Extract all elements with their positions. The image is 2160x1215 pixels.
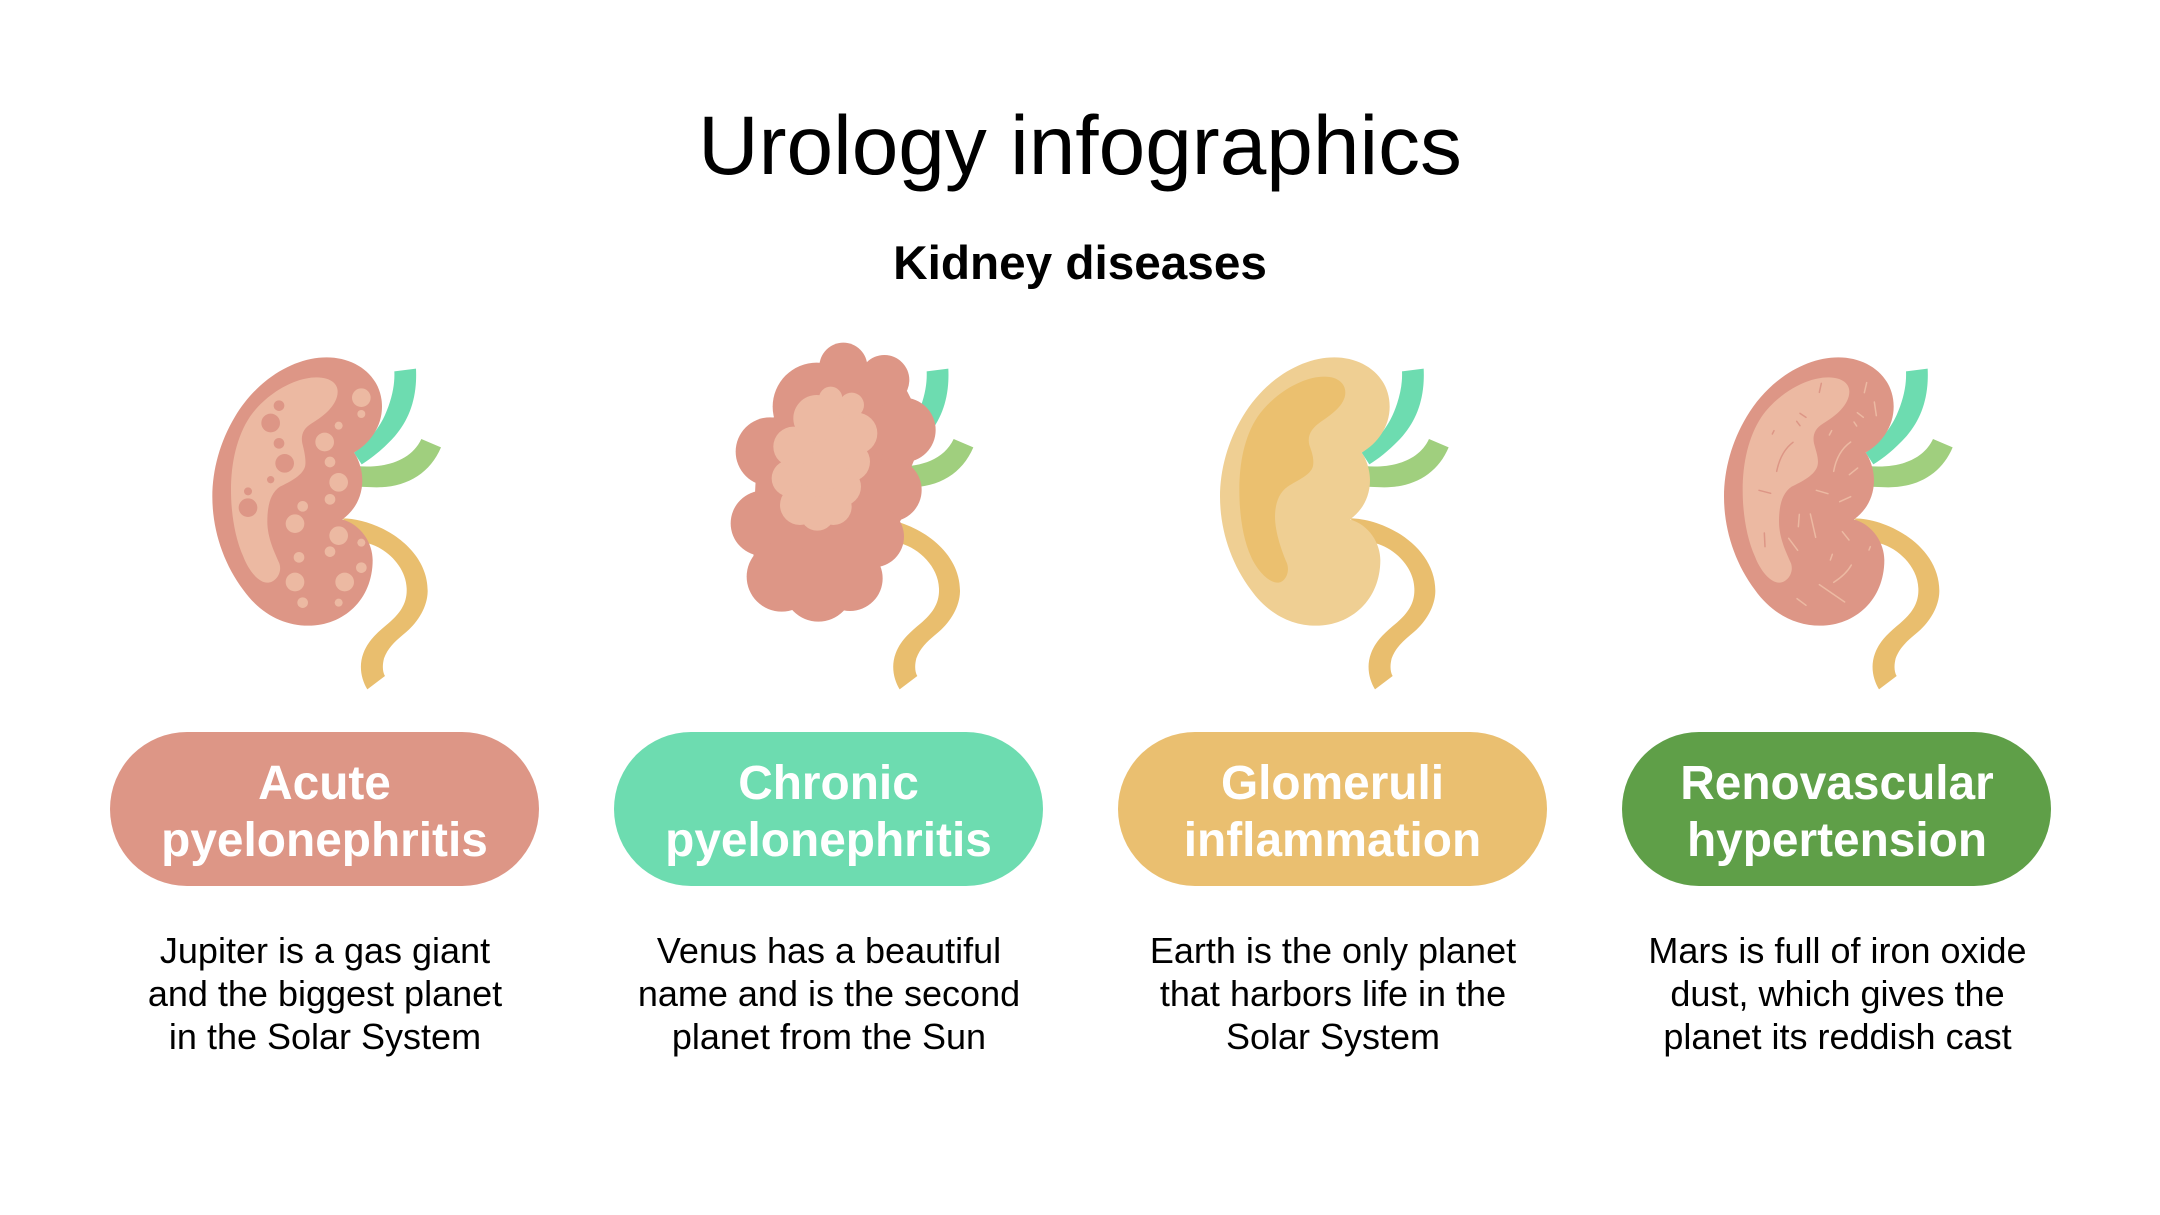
description: renovascular hypertension: Mars is full of iron oxide	[1648, 930, 2027, 971]
panel: renovascular hypertension	[1622, 357, 2051, 1057]
description: glomeruli inflammation: Solar System	[1226, 1016, 1440, 1057]
subtitle: Kidney diseases	[893, 237, 1267, 290]
description: renovascular hypertension: planet its reddish cast	[1663, 1016, 2012, 1057]
description: renovascular hypertension: dust, which gives the	[1670, 973, 2005, 1014]
description: glomeruli inflammation: Earth is the only planet	[1150, 930, 1516, 971]
panel: glomeruli inflammation	[1118, 357, 1547, 1057]
label pill: renovascular hypertension: hypertension	[1687, 814, 1987, 867]
description: glomeruli inflammation: that harbors life in the	[1160, 973, 1506, 1014]
label pill: chronic pyelonephritis: pyelonephritis	[665, 814, 992, 867]
icon: kidney with dots	[212, 357, 441, 689]
icon: inflamed yellow kidney	[1220, 357, 1449, 689]
label pill: renovascular hypertension: Renovascular	[1680, 757, 1994, 810]
description: acute pyelonephritis: Jupiter is a gas giant	[160, 930, 490, 971]
description: glomeruli inflammation	[1150, 930, 1516, 1057]
panel: acute pyelonephritis	[110, 357, 539, 1057]
icon: scarred kidney	[1724, 357, 1953, 689]
label pill: glomeruli inflammation: Glomeruli	[1221, 757, 1444, 810]
description: chronic pyelonephritis: Venus has a beautiful	[657, 930, 1001, 971]
label pill: acute pyelonephritis: Acute	[258, 757, 391, 810]
label pill: renovascular hypertension	[1622, 732, 2051, 886]
label pill: acute pyelonephritis: pyelonephritis	[161, 814, 488, 867]
description: acute pyelonephritis	[148, 930, 502, 1057]
icon: shrunken bumpy kidney	[731, 343, 973, 689]
label pill: chronic pyelonephritis: Chronic	[738, 757, 919, 810]
title: Urology infographics	[698, 98, 1462, 192]
label pill: acute pyelonephritis	[110, 732, 539, 886]
label pill: glomeruli inflammation: inflammation	[1184, 814, 1481, 867]
description: chronic pyelonephritis: name and is the second	[638, 973, 1020, 1014]
description: acute pyelonephritis: in the Solar System	[169, 1016, 481, 1057]
label pill: glomeruli inflammation	[1118, 732, 1547, 886]
description: renovascular hypertension	[1648, 930, 2027, 1057]
panel: chronic pyelonephritis	[614, 343, 1043, 1057]
label pill: chronic pyelonephritis	[614, 732, 1043, 886]
description: chronic pyelonephritis	[638, 930, 1020, 1057]
description: acute pyelonephritis: and the biggest planet	[148, 973, 502, 1014]
description: chronic pyelonephritis: planet from the Sun	[672, 1016, 986, 1057]
